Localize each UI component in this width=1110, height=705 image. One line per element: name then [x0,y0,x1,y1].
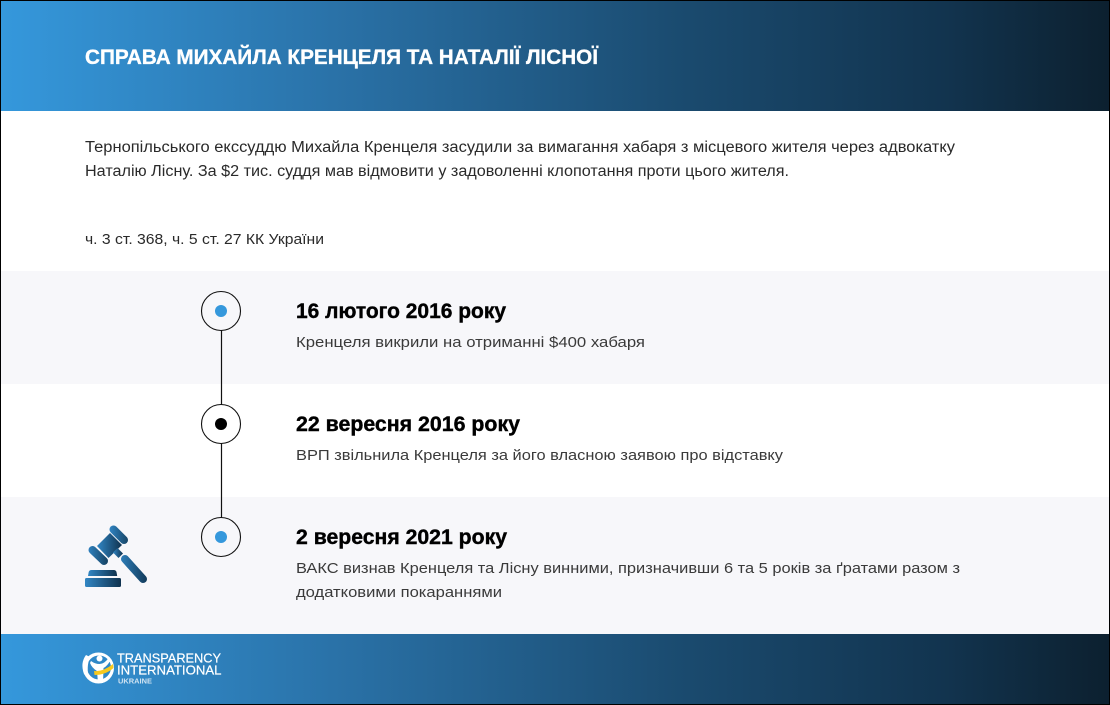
intro text: Наталію Лісну. За $2 тис. суддя мав відмовити у задоволенні клопотання проти цього жителя. [85,163,789,180]
intro text: Тернопільського екссуддю Михайла Кренцеля засудили за вимагання хабаря з місцевого жителя через адвокатку [85,139,955,156]
timeline connector line [220,330,222,518]
logo wordmark: INTERNATIONAL [117,662,222,678]
intro text [85,139,955,180]
logo: Transparency International Ukraine [82,650,222,686]
timeline marker 1 [202,292,240,330]
footer banner [0,634,1110,705]
event 3: ВАКС визнав Кренцеля та Лісну винними, призначивши 6 та 5 років за ґратами разом з [296,560,960,577]
logo wordmark: UKRAINE [118,678,152,686]
event 1: 16 лютого 2016 року [296,300,506,323]
legal reference: ч. 3 ст. 368, ч. 5 ст. 27 КК України [85,232,324,248]
event 3: додатковими покараннями [296,584,502,601]
logo emblem [82,652,114,684]
logo wordmark: TRANSPARENCY [117,650,221,666]
event 3: 2 вересня 2021 року [296,526,507,549]
title: СПРАВА МИХАЙЛА КРЕНЦЕЛЯ ТА НАТАЛІЇ ЛІСНОЇ [85,44,599,69]
event 2: 22 вересня 2016 року [296,413,520,436]
icon: gavel [85,530,143,587]
timeline marker 3 [202,518,240,556]
timeline row 1 background [0,271,1110,384]
event 2: ВРП звільнила Кренцеля за його власною заявою про відставку [296,447,784,464]
header banner [0,0,1110,111]
event 2 [296,413,784,464]
logo wordmark [117,650,222,686]
timeline marker 2 [202,404,240,444]
timeline row 3 background [0,497,1110,634]
event 1: Кренцеля викрили на отриманні $400 хабаря [296,334,645,351]
event 1 [296,300,645,351]
event 3 [296,526,960,601]
